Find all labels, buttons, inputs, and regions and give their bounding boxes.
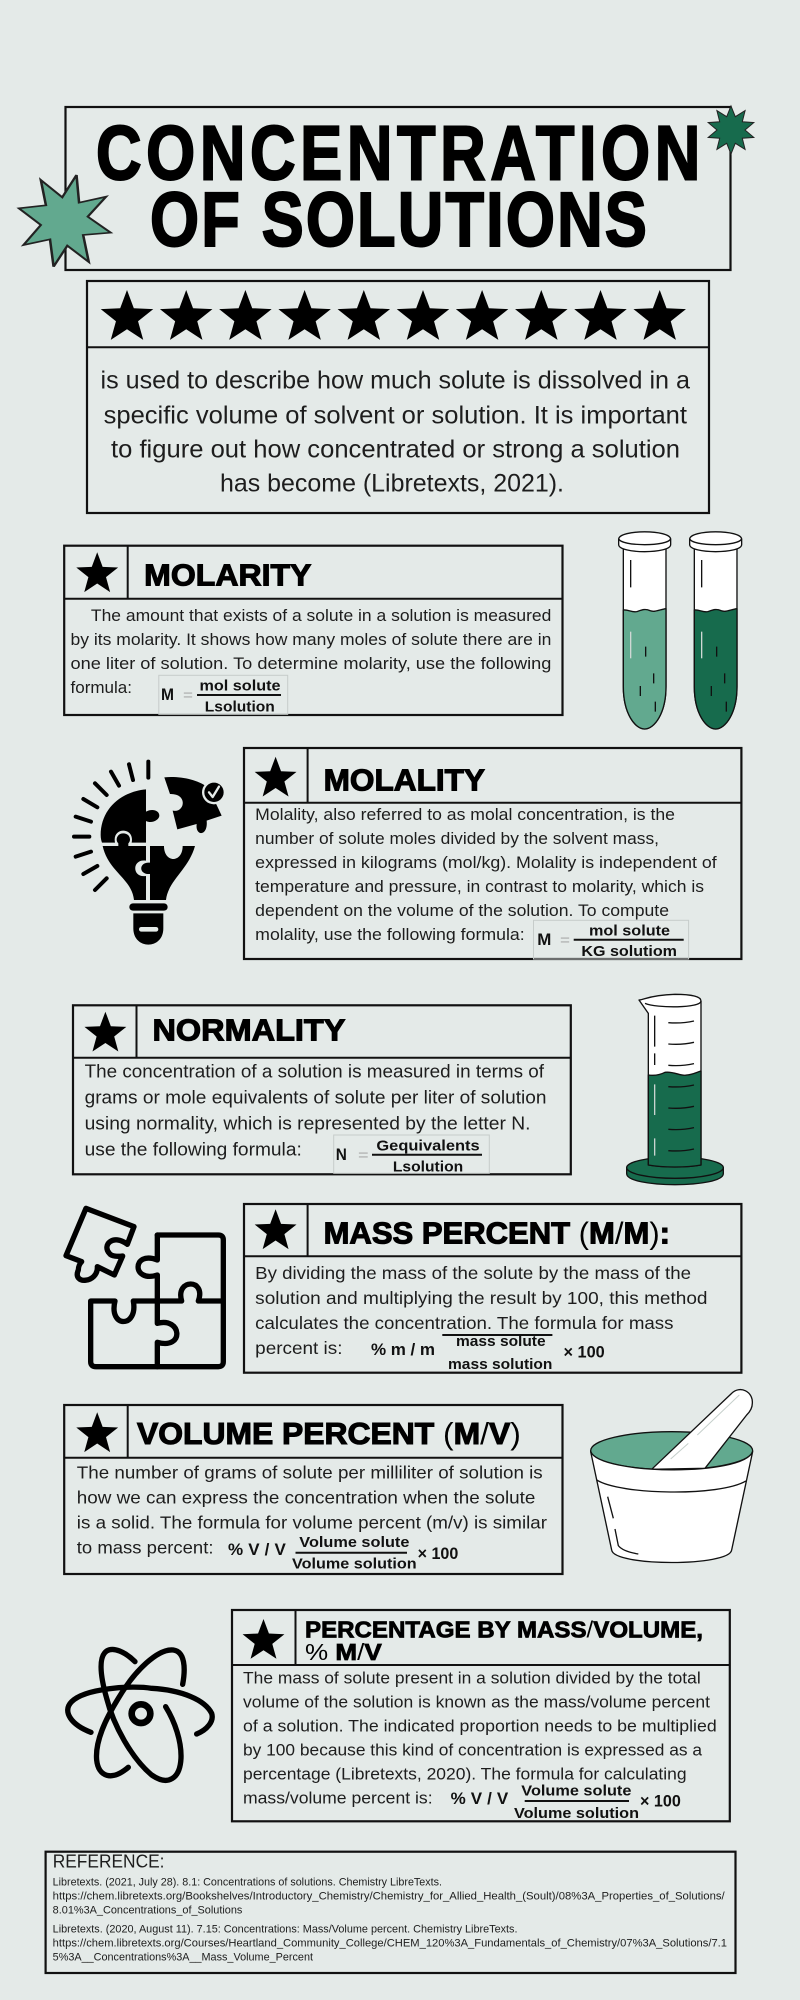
percentage text: by 100 because this kind of concentration is expressed as a bbox=[243, 1740, 703, 1759]
mass percent formula bbox=[371, 1333, 605, 1373]
reference list: 8.01%3A_Concentrations_of_Solutions bbox=[53, 1905, 242, 1917]
mass percent text: solution and multiplying the result by 100, this method bbox=[255, 1288, 707, 1308]
panel: molarity bbox=[64, 546, 562, 715]
percentage text bbox=[243, 1668, 717, 1807]
normality formula: = bbox=[358, 1147, 369, 1164]
normality text: The concentration of a solution is measured in terms of bbox=[85, 1061, 545, 1081]
percentage formula: × 100 bbox=[640, 1792, 681, 1811]
volume percent formula: % V / V bbox=[228, 1540, 286, 1559]
percentage formula: Volume solute bbox=[521, 1782, 631, 1799]
heading: molarity: MOLARITY bbox=[144, 558, 312, 593]
heading: molality: MOLALITY bbox=[324, 763, 485, 798]
test tube: dark green bbox=[690, 532, 742, 729]
mass percent text: percent is: bbox=[255, 1338, 342, 1358]
mass percent formula: % m / m bbox=[371, 1340, 435, 1359]
percentage text: of a solution. The indicated proportion needs to be multiplied bbox=[243, 1716, 717, 1735]
molarity formula: = bbox=[183, 687, 193, 704]
volume percent text: The number of grams of solute per milliliter of solution is bbox=[77, 1462, 543, 1482]
normality text: using normality, which is represented by the letter N. bbox=[85, 1113, 530, 1133]
icon: star bbox=[255, 1209, 297, 1249]
mass percent formula: mass solute bbox=[456, 1333, 546, 1350]
row of ten stars bbox=[101, 290, 686, 340]
title text: OF SOLUTIONS bbox=[150, 176, 647, 262]
mass percent text: calculates the concentration. The formula for mass bbox=[255, 1313, 674, 1333]
icon: star bbox=[84, 1012, 126, 1051]
panel: normality bbox=[73, 1005, 571, 1175]
molality text: expressed in kilograms (mol/kg). Molality is independent of bbox=[255, 853, 717, 872]
icon: test tubes bbox=[619, 532, 742, 729]
molarity formula: Lsolution bbox=[205, 698, 275, 715]
heading: normality: NORMALITY bbox=[152, 1013, 346, 1048]
intro text: specific volume of solvent or solution. It is important bbox=[104, 401, 687, 429]
molality text: Molality, also referred to as molal concentration, is the bbox=[255, 805, 675, 824]
heading: percentage by mass/volume: % M/V bbox=[305, 1639, 382, 1665]
molarity text: by its molarity. It shows how many moles of solute there are in bbox=[70, 630, 551, 649]
volume percent text: to mass percent: bbox=[77, 1537, 214, 1557]
intro text: has become (Libretexts, 2021). bbox=[220, 470, 564, 498]
normality formula bbox=[334, 1135, 489, 1175]
mass percent text bbox=[255, 1263, 707, 1358]
molality formula: = bbox=[560, 932, 570, 949]
percentage text: mass/volume percent is: bbox=[243, 1788, 433, 1807]
volume percent formula: Volume solution bbox=[292, 1556, 417, 1573]
volume percent text: how we can express the concentration when the solute bbox=[77, 1487, 535, 1507]
normality text: grams or mole equivalents of solute per liter of solution bbox=[85, 1087, 546, 1107]
volume percent text bbox=[77, 1462, 547, 1557]
mass percent text: By dividing the mass of the solute by the mass of the bbox=[255, 1263, 691, 1283]
volume percent formula: × 100 bbox=[418, 1544, 458, 1563]
icon: small dark green starburst bbox=[708, 106, 754, 154]
intro panel bbox=[87, 281, 709, 513]
volume percent formula bbox=[228, 1534, 458, 1573]
panel: volume percent bbox=[64, 1405, 562, 1574]
normality formula: Lsolution bbox=[393, 1158, 463, 1175]
molality text: molality, use the following formula: bbox=[255, 925, 525, 944]
intro text: to figure out how concentrated or strong a solution bbox=[111, 436, 680, 464]
molality text: number of solute moles divided by the solvent mass, bbox=[255, 829, 659, 848]
heading: volume percent: VOLUME PERCENT (M/V) bbox=[137, 1416, 521, 1451]
reference heading: REFERENCE: bbox=[53, 1851, 165, 1871]
molarity formula: M bbox=[161, 685, 174, 704]
reference list: 5%3A__Concentrations%3A__Mass_Volume_Percent bbox=[53, 1952, 313, 1964]
normality formula: N bbox=[336, 1145, 347, 1164]
icon: puzzle light bulb bbox=[74, 762, 226, 945]
mass percent formula: mass solution bbox=[448, 1356, 552, 1373]
molarity text: formula: bbox=[70, 678, 132, 697]
panel: percentage by mass/volume bbox=[232, 1610, 730, 1822]
percentage text: The mass of solute present in a solution divided by the total bbox=[243, 1668, 701, 1687]
molality formula: KG solutiom bbox=[581, 943, 677, 960]
reference list: Libretexts. (2020, August 11). 7.15: Concentrations: Mass/Volume percent. Chemistry LibreTexts. bbox=[53, 1924, 517, 1936]
molality formula bbox=[534, 920, 689, 960]
percentage text: percentage (Libretexts, 2020). The formula for calculating bbox=[243, 1764, 687, 1783]
panel: reference bbox=[46, 1851, 736, 1973]
normality formula: Gequivalents bbox=[376, 1137, 480, 1154]
icon: star bbox=[76, 1412, 118, 1452]
icon: mortar and pestle bbox=[591, 1390, 753, 1562]
volume percent text: is a solid. The formula for volume percent (m/v) is similar bbox=[77, 1512, 547, 1532]
icon: atom bbox=[68, 1649, 212, 1780]
icon: graduated cylinder bbox=[627, 994, 723, 1185]
intro text bbox=[100, 366, 690, 498]
percentage formula: % V / V bbox=[451, 1789, 509, 1808]
icon: puzzle pieces bbox=[66, 1208, 223, 1367]
title panel bbox=[19, 106, 754, 270]
heading: mass percent: MASS PERCENT (M/M): bbox=[324, 1215, 670, 1250]
reference list: https://chem.libretexts.org/Courses/Heartland_Community_College/CHEM_120%3A_Fundamentals_of_Chemistry/07%3A_Solutions/7.1 bbox=[53, 1938, 727, 1950]
molarity formula bbox=[159, 675, 288, 715]
heading: percentage by mass/volume bbox=[305, 1616, 703, 1665]
molality formula: mol solute bbox=[589, 922, 670, 939]
normality text: use the following formula: bbox=[85, 1139, 302, 1159]
molality text: temperature and pressure, in contrast to molarity, which is bbox=[255, 877, 704, 896]
molarity text: The amount that exists of a solute in a solution is measured bbox=[91, 606, 551, 625]
percentage text: volume of the solution is known as the mass/volume percent bbox=[243, 1692, 710, 1711]
icon: star bbox=[255, 757, 297, 796]
molarity text bbox=[70, 606, 551, 697]
molarity formula: mol solute bbox=[200, 677, 280, 694]
intro text: is used to describe how much solute is dissolved in a bbox=[100, 366, 690, 394]
title text bbox=[96, 109, 700, 262]
molality text: dependent on the volume of the solution. To compute bbox=[255, 901, 669, 920]
percentage formula bbox=[451, 1782, 681, 1822]
molality text bbox=[255, 805, 717, 944]
heading: percentage by mass/volume: PERCENTAGE BY MASS /VOLUME, bbox=[305, 1616, 703, 1642]
title text: CONCENTRATION bbox=[96, 109, 700, 196]
molarity text: one liter of solution. To determine molarity, use the following bbox=[70, 654, 551, 673]
icon: star bbox=[76, 552, 118, 592]
mass percent formula: × 100 bbox=[564, 1342, 605, 1361]
panel: molality bbox=[244, 748, 741, 960]
normality text bbox=[85, 1061, 546, 1159]
reference list: https://chem.libretexts.org/Bookshelves/Introductory_Chemistry/Chemistry_for_Allied_Health_(Soult)/08%3A_Properties_of_Solutions/ bbox=[53, 1891, 725, 1903]
icon: star bbox=[243, 1619, 284, 1659]
molality formula: M bbox=[537, 930, 551, 949]
panel: mass percent bbox=[244, 1204, 741, 1373]
reference list bbox=[53, 1877, 727, 1964]
icon: large green starburst bbox=[19, 175, 111, 267]
test tube: light green bbox=[619, 532, 671, 729]
volume percent formula: Volume solute bbox=[299, 1534, 409, 1551]
reference list: Libretexts. (2021, July 28). 8.1: Concentrations of solutions. Chemistry LibreTexts. bbox=[53, 1877, 442, 1889]
percentage formula: Volume solution bbox=[514, 1805, 639, 1822]
